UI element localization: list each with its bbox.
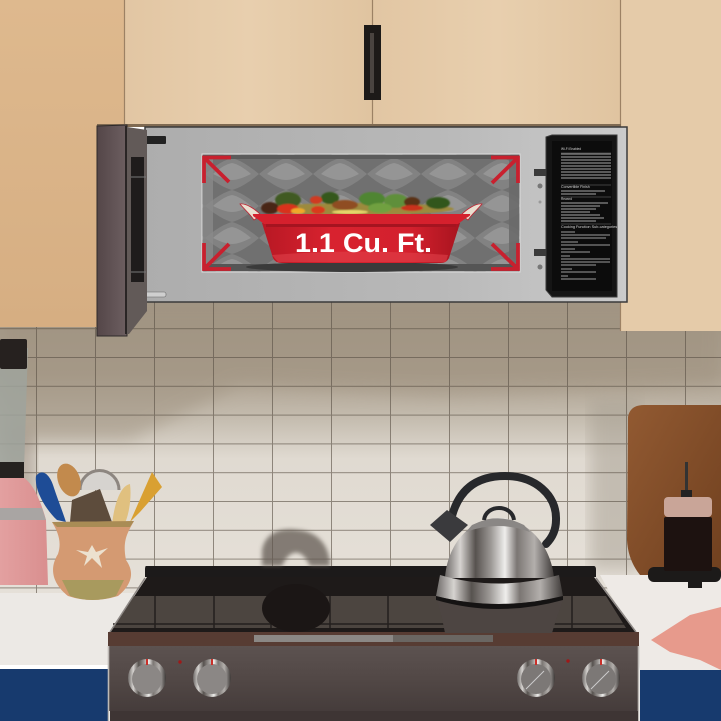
range back guard [145,566,596,577]
crock body [52,521,134,600]
cooktop reflections [113,596,626,628]
range front edge [108,632,639,646]
blender lid [0,339,27,369]
panel heading: cooking functions: Cooking Function Sub-categories [561,225,617,229]
control panel fascia [109,646,639,711]
kettle lid knob [484,508,514,520]
kettle shadow reflection [262,584,330,632]
kettle shadow on wall [262,529,330,566]
kettle lid [466,518,530,532]
capacity label: 1.1 Cu. Ft. [295,228,432,258]
indicator lights [178,659,570,664]
kettle spout [430,510,468,542]
crock rim [52,521,134,527]
turntable [246,262,458,272]
food in dish [261,192,454,215]
orange whisk brush [130,472,162,522]
knob four [582,659,620,697]
kettle [430,476,563,633]
panel copy two [561,191,605,194]
red dish [240,204,482,263]
fascia edges [108,646,638,721]
cabinet handle [364,25,381,100]
kettle base ring [436,575,563,604]
range [108,566,639,721]
kettle handle [450,476,556,544]
countertop right [600,575,721,670]
wooden spoon [53,460,85,500]
hinge latches [133,136,166,297]
panel heading: reword: Reword [561,197,572,201]
bottle tray [648,567,721,588]
microwave [133,127,627,302]
strainer [80,471,119,490]
arrow: bottom right corner [491,243,518,269]
range display strip right [393,635,493,642]
knob two [193,659,231,697]
range silver strip [254,635,393,642]
tiled backsplash wall [0,295,721,610]
control panel [546,135,617,297]
door latch slots [534,169,546,270]
panel body copy [561,154,611,178]
kettle dome [445,518,554,578]
knob one [128,659,166,697]
cabinet: left tall [0,0,125,327]
panel heading: wi-fi: Wi-Fi Enabled [561,147,581,151]
cooktop side trims [110,578,636,632]
blender jar [0,348,28,470]
panel copy four [561,232,610,279]
open microwave door [97,125,147,336]
cabinet: right tall [621,0,721,331]
pale wooden spoon [112,484,131,525]
blender [0,339,48,585]
arrow: top left corner [204,158,231,183]
kettle base shadow [436,596,563,609]
blue lower cabinet right [640,670,721,721]
cavity interior [202,154,520,272]
blender pink base [0,478,48,585]
crock base band [62,580,124,600]
range lower panel [110,711,638,721]
arrow: top right corner [491,158,518,183]
blender collar [0,462,24,480]
cabinet: above microwave right door [373,0,621,125]
cabinet: above microwave left door [125,0,373,125]
blender silver band [0,508,46,520]
upper cabinets [0,0,721,331]
arrow: bottom left corner [204,243,231,269]
kettle reflection [437,600,563,633]
glass bottle [664,462,712,571]
cutting board [627,405,721,575]
microwave body [145,127,627,302]
crock flower [76,545,108,568]
utensil crock [36,460,162,600]
cooktop tile reflection band [113,596,626,628]
panel heading: convertible: Convertible Finish [561,185,590,189]
panel copy three [561,203,608,221]
countertop left [0,593,137,665]
range glass cooktop [110,577,636,633]
blue spatula [36,472,66,522]
metal utensils [70,489,112,522]
tea towel [651,607,721,670]
blue lower cabinet left [0,669,108,721]
knob three [517,659,555,697]
